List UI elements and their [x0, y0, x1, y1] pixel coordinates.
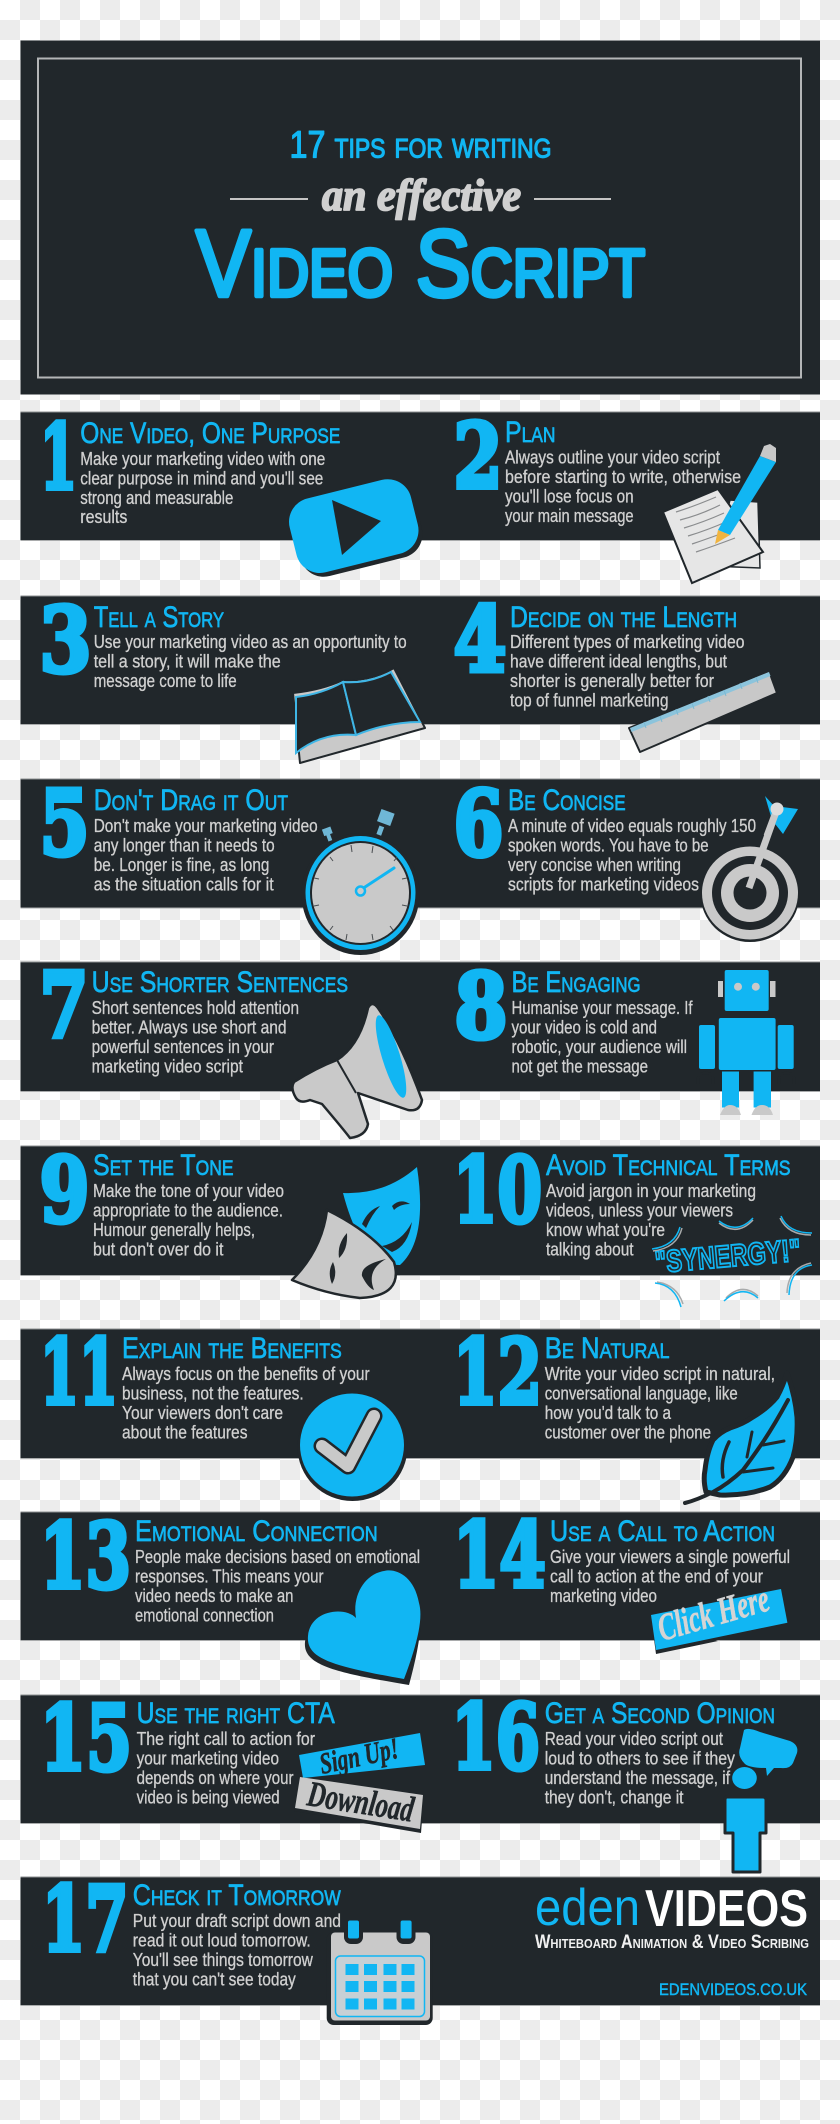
tip 8 text: your video is cold and	[512, 1018, 657, 1038]
number 13: 13	[40, 1504, 131, 1610]
tip 4 text: top of funnel marketing	[510, 690, 668, 710]
tip 7 text: Short sentences hold attention	[92, 998, 299, 1018]
tip 17 text: that you can't see today	[133, 1970, 296, 1990]
heading: an effective with side rules: an effective	[322, 171, 521, 220]
tip 3 text: message come to life	[94, 671, 237, 691]
icon: theatre masks	[292, 1167, 420, 1298]
tip 13 text: video needs to make an	[135, 1586, 294, 1606]
tip 3 text: tell a story, it will make the	[94, 652, 281, 672]
website address: EDENVIDEOS.CO.UK	[659, 1980, 808, 1999]
tip 10 text	[546, 1181, 756, 1260]
number 15: 15	[40, 1686, 132, 1792]
tip 7 text: marketing video script	[92, 1056, 243, 1076]
tip 14 title: Use a Call to Action	[550, 1515, 775, 1548]
icon: megaphone	[292, 1004, 422, 1138]
tip 15 text: The right call to action for	[137, 1729, 315, 1749]
tip 14 text: call to action at the end of your	[550, 1566, 763, 1586]
panel: tips 13 and 14	[20, 1502, 820, 1685]
tip 6 text	[508, 816, 756, 894]
heading: Video Script: Video Script	[196, 211, 645, 317]
tip 11 text	[122, 1364, 370, 1442]
tip 4 title: Decide on the Length	[510, 601, 737, 634]
tip 11 title: Explain the Benefits	[122, 1332, 342, 1365]
tip 7 title: Use Shorter Sentences	[92, 966, 348, 999]
tip 17 text: You'll see things tomorrow	[133, 1950, 314, 1970]
tip 10 text: videos, unless your viewers	[546, 1200, 733, 1220]
number 11: 11	[40, 1320, 118, 1426]
tip 1 text	[80, 449, 325, 527]
tip 11 text: Always focus on the benefits of your	[122, 1364, 370, 1384]
panel: tips 11 and 12	[20, 1320, 820, 1503]
tip 14 text: Give your viewers a single powerful	[550, 1547, 790, 1567]
tip 16 text: they don't, change it	[545, 1788, 684, 1808]
tip 4 text: have different ideal lengths, but	[510, 652, 727, 672]
tip 6 title: Be Concise	[508, 784, 626, 817]
tip 15 text	[137, 1729, 315, 1808]
tip 16 text: Read your video script out	[545, 1729, 723, 1749]
panel: tips 7 and 8	[20, 952, 820, 1138]
tip 7 text: better. Always use short and	[92, 1018, 287, 1038]
tip 14 text: marketing video	[550, 1586, 657, 1606]
tip 4 text: shorter is generally better for	[510, 671, 714, 691]
tip 15 text: depends on where your	[137, 1768, 294, 1788]
tip 2 text: Always outline your video script	[505, 448, 720, 468]
icon: click here button: Click Here	[653, 1578, 774, 1650]
icon: calendar	[327, 1920, 433, 2025]
icon: download button: Download	[304, 1773, 417, 1830]
tip 6 text: A minute of video equals roughly 150	[508, 816, 756, 836]
tip 1 text: Make your marketing video with one	[80, 449, 325, 469]
tip 9 text: appropriate to the audience.	[93, 1200, 283, 1220]
tip 10 text: talking about	[546, 1240, 634, 1260]
panel: tips 3 and 4	[20, 587, 820, 763]
tip 16 title: Get a Second Opinion	[545, 1697, 775, 1730]
tip 10 title: Avoid Technical Terms	[546, 1149, 791, 1182]
tip 13 title: Emotional Connection	[135, 1515, 378, 1548]
tip 15 text: video is being viewed	[137, 1788, 280, 1808]
tip 14 text	[550, 1547, 790, 1606]
number 1: 1	[40, 404, 77, 510]
tip 11 text: about the features	[122, 1422, 248, 1442]
header panel	[20, 40, 820, 394]
tip 8 text	[512, 998, 693, 1076]
tip 5 text	[94, 816, 318, 894]
icon: robot	[698, 970, 794, 1115]
tip 2 text	[505, 448, 741, 526]
number 12: 12	[453, 1320, 542, 1426]
tip 10 text: Avoid jargon in your marketing	[546, 1181, 756, 1201]
tip 5 title: Don't Drag it Out	[94, 784, 288, 817]
number 2: 2	[454, 404, 502, 510]
tip 13 text: People make decisions based on emotional	[135, 1547, 420, 1567]
icon: stopwatch	[302, 809, 420, 955]
tip 17 title: Check it Tomorrow	[133, 1879, 341, 1912]
tip 12 title: Be Natural	[545, 1332, 670, 1365]
tip 9 title: Set the Tone	[93, 1149, 234, 1182]
tip 16 text: understand the message, if	[545, 1768, 731, 1788]
number 4: 4	[454, 587, 506, 693]
tip 1 title: One Video, One Purpose	[80, 417, 340, 450]
tip 8 text: not get the message	[512, 1056, 648, 1076]
number 16: 16	[452, 1684, 540, 1790]
tip 6 text: scripts for marketing videos	[508, 874, 699, 894]
tip 10 text: know what you're	[546, 1220, 665, 1240]
tip 11 text: Your viewers don't care	[122, 1403, 283, 1423]
icon: open book	[293, 668, 425, 763]
icon: sign up button: Sign Up!	[317, 1732, 402, 1781]
tip 8 text: robotic, your audience will	[512, 1037, 687, 1057]
tip 2 text: before starting to write, otherwise	[505, 467, 741, 487]
tip 7 text	[92, 998, 299, 1076]
heading: 17 tips for writing: 17 tips for writing	[290, 124, 552, 166]
tip 12 text: how you'd talk to a	[545, 1403, 672, 1423]
tip 16 text	[545, 1729, 735, 1808]
icon: target and arrow	[700, 796, 800, 942]
tip 1 text: results	[80, 507, 127, 527]
tip 15 text: your marketing video	[137, 1748, 279, 1768]
tip 9 text: Make the tone of your video	[93, 1181, 284, 1201]
tip 3 text: Use your marketing video as an opportunity to	[94, 632, 407, 652]
number 17: 17	[42, 1866, 128, 1972]
logo: edenVIDEOS: eden	[535, 1879, 640, 1937]
tip 8 text: Humanise your message. If	[512, 998, 693, 1018]
tip 9 text: Humour generally helps,	[93, 1220, 255, 1240]
tip 17 text: read it out loud tomorrow.	[133, 1930, 311, 1950]
tip 3 text	[94, 632, 407, 691]
tip 17 text	[133, 1911, 341, 1990]
panel: tips 1 and 2	[20, 404, 820, 583]
tip 2 title: Plan	[505, 416, 556, 449]
tip 12 text: customer over the phone	[545, 1422, 711, 1442]
icon: ruler	[629, 671, 777, 752]
icon: synergy burst	[652, 1216, 812, 1307]
number 8: 8	[454, 954, 508, 1060]
tip 7 text: powerful sentences in your	[92, 1037, 274, 1057]
tip 12 text: Write your video script in natural,	[545, 1364, 775, 1384]
tip 5 text: as the situation calls for it	[94, 874, 274, 894]
tip 12 text	[545, 1364, 775, 1442]
tip 17 text: Put your draft script down and	[133, 1911, 341, 1931]
tip 4 text	[510, 632, 744, 710]
icon: heart	[305, 1570, 421, 1685]
panel: tip 17 and logo	[20, 1866, 820, 2025]
tip 13 text: responses. This means your	[135, 1566, 324, 1586]
number 10: 10	[453, 1138, 542, 1244]
panel: tips 15 and 16	[20, 1684, 820, 1872]
number 9: 9	[40, 1138, 90, 1244]
tip 4 text: Different types of marketing video	[510, 632, 744, 652]
icon: person with speech bubble	[725, 1729, 797, 1872]
tip 2 text: you'll lose focus on	[505, 486, 634, 506]
panel: tips 5 and 6	[20, 770, 820, 955]
tip 8 title: Be Engaging	[512, 966, 640, 999]
tip 9 text: but don't over do it	[93, 1240, 223, 1260]
number 3: 3	[40, 588, 92, 694]
icon: play button	[284, 474, 428, 582]
number 5: 5	[40, 770, 90, 876]
tip 6 text: very concise when writing	[508, 855, 681, 875]
tip 9 text	[93, 1181, 284, 1260]
tip 5 text: any longer than it needs to	[94, 836, 275, 856]
icon: paper and pencil	[663, 444, 776, 583]
tip 16 text: loud to others to see if they	[545, 1748, 735, 1768]
tip 15 title: Use the right CTA	[137, 1697, 335, 1730]
tip 13 text	[135, 1547, 420, 1626]
tip 3 title: Tell a Story	[94, 601, 224, 634]
number 14: 14	[453, 1502, 546, 1608]
logo: edenVIDEOS	[535, 1879, 808, 1938]
tip 11 text: business, not the features.	[122, 1384, 304, 1404]
icon: check mark	[298, 1393, 408, 1501]
tip 5 text: be. Longer is fine, as long	[94, 855, 269, 875]
panel: tips 9 and 10	[20, 1138, 820, 1307]
tip 1 text: strong and measurable	[80, 488, 233, 508]
tip 2 text: your main message	[505, 506, 634, 526]
tip 13 text: emotional connection	[135, 1606, 274, 1626]
tip 5 text: Don't make your marketing video	[94, 816, 318, 836]
tip 12 text: conversational language, like	[545, 1384, 738, 1404]
logo: edenVIDEOS: VIDEOS	[645, 1880, 808, 1938]
tip 6 text: spoken words. You have to be	[508, 836, 709, 856]
icon: download button	[294, 1773, 424, 1833]
tip 1 text: clear purpose in mind and you'll see	[80, 468, 323, 488]
number 6: 6	[454, 771, 504, 877]
icon: leaf	[685, 1373, 797, 1503]
number 7: 7	[40, 952, 88, 1058]
icon: click here button	[651, 1578, 787, 1654]
